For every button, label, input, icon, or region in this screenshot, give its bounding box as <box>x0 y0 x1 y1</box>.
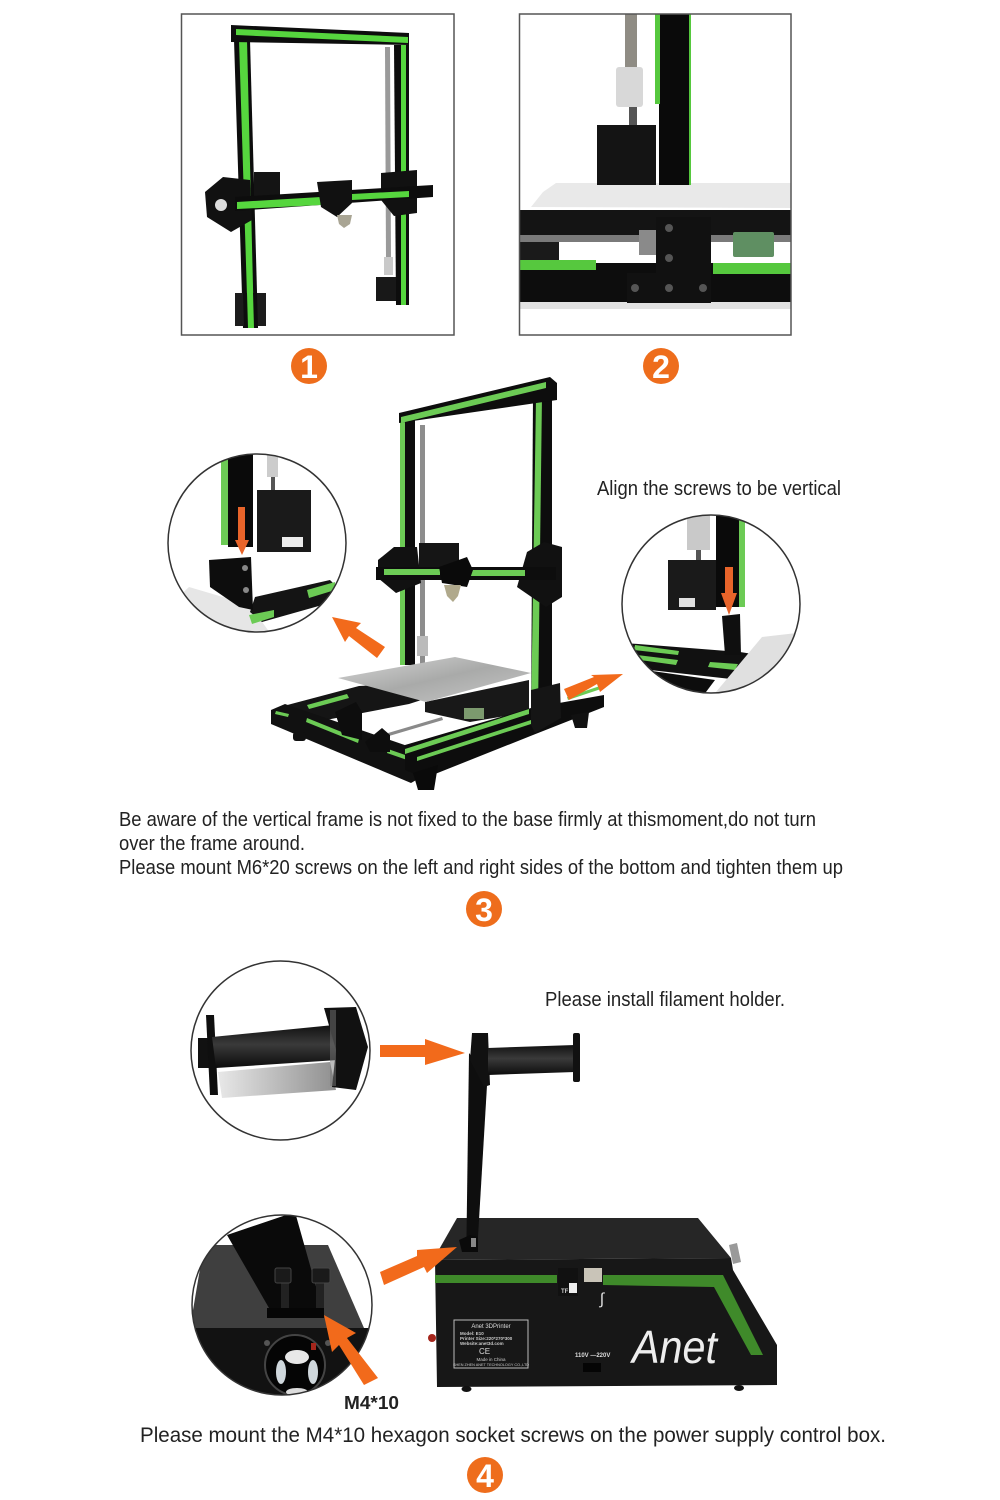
panel: photo 2, motor close-up <box>519 14 791 335</box>
front face <box>435 1258 777 1387</box>
screw 2 shank <box>316 1283 324 1308</box>
top bar green strip <box>236 29 408 43</box>
label marks: CE <box>479 1347 490 1356</box>
left upright green strip <box>239 42 254 293</box>
arrow: to right detail <box>564 674 623 700</box>
lower strip over motor <box>247 293 254 328</box>
bed <box>531 183 791 208</box>
screw <box>625 14 637 68</box>
right upright green <box>531 395 542 717</box>
x arm green right <box>469 570 525 576</box>
green right <box>713 263 791 274</box>
front green 2 <box>417 720 531 761</box>
knob <box>729 1243 741 1264</box>
line 2: over the frame around. <box>119 833 305 855</box>
port panel <box>558 1268 578 1296</box>
extruder motor <box>419 543 459 567</box>
badge 2: 2 <box>652 349 670 385</box>
x arm green right <box>352 191 409 200</box>
label: M4*10: M4*10 <box>344 1393 399 1413</box>
upright <box>716 512 739 607</box>
arrow: to holder <box>380 1039 465 1065</box>
panel 2 border <box>520 14 791 335</box>
detail circle: screws <box>190 1212 375 1398</box>
bracket <box>722 614 741 655</box>
rail <box>250 580 340 622</box>
extruder motor <box>254 172 280 196</box>
grey block <box>639 230 656 255</box>
foot right <box>571 712 589 728</box>
right flange <box>324 1007 368 1090</box>
underside of bed <box>425 680 529 722</box>
mid rail <box>520 242 559 260</box>
coupler <box>616 67 643 107</box>
back rail green <box>307 694 349 709</box>
paragraph: step 3 notes <box>119 809 843 879</box>
arrow: to M4 screw <box>324 1315 378 1385</box>
logo: Anet <box>629 1321 719 1373</box>
slider block 2 <box>365 728 390 752</box>
orange arrow <box>235 507 249 555</box>
label: filament holder: Please install filament holder. <box>545 989 785 1011</box>
usb port <box>584 1268 602 1282</box>
x arm green left <box>384 569 440 575</box>
x arm green left <box>237 197 321 209</box>
mounting holes <box>264 1340 331 1346</box>
base front rail <box>405 695 604 778</box>
right plate <box>517 542 562 607</box>
lower upright over motor <box>243 293 258 328</box>
voltage switch <box>583 1363 601 1372</box>
motor <box>668 560 716 610</box>
badge 1 <box>291 348 327 385</box>
right green <box>567 686 601 700</box>
usb symbol: ∫ <box>599 1291 606 1308</box>
x arm <box>250 185 433 210</box>
top bar <box>231 25 409 45</box>
pole bracket <box>459 1235 478 1252</box>
upright green <box>739 512 745 607</box>
holder end flange <box>573 1033 580 1082</box>
feet <box>462 1385 744 1392</box>
circle outline <box>168 454 346 632</box>
cylinder <box>212 1025 338 1068</box>
detail circle: spool <box>191 961 370 1140</box>
shaft <box>696 550 701 562</box>
voltage label: 110V —220V <box>575 1353 610 1359</box>
base left rail green c <box>387 749 411 761</box>
bracket <box>209 557 253 610</box>
arrow: to left detail <box>332 617 385 658</box>
back rails of base <box>276 682 440 724</box>
circle outline <box>191 961 370 1140</box>
control box with filament holder <box>428 1033 777 1392</box>
motor <box>257 490 311 552</box>
carriage <box>439 557 473 587</box>
motor shaft <box>629 107 637 125</box>
pole <box>227 1212 322 1308</box>
panel: photo 1, vertical frame <box>205 25 433 328</box>
motor <box>597 125 656 185</box>
top bar green <box>401 382 546 423</box>
holder roller <box>488 1045 575 1075</box>
badge 4 <box>467 1457 503 1494</box>
coupler <box>687 515 710 550</box>
rail green top <box>634 645 679 655</box>
right upright <box>531 385 552 725</box>
rail band <box>625 643 790 680</box>
bed plate <box>338 657 531 702</box>
rod <box>519 235 791 242</box>
flange highlight <box>330 1010 336 1086</box>
left plate <box>378 547 421 593</box>
circle outline <box>192 1215 372 1395</box>
bottom corner bracket <box>531 683 561 733</box>
arrow: to bracket <box>380 1247 457 1285</box>
badge 4: 4 <box>476 1458 494 1494</box>
line 1: Be aware of the vertical frame is not fixed to the base firmly at thismoment,do not turn <box>119 809 816 831</box>
panel 1 border <box>182 14 454 335</box>
right plate <box>381 170 417 216</box>
base left rail <box>271 704 425 783</box>
z rod <box>420 425 425 665</box>
detail circle right <box>622 512 805 700</box>
left plate <box>205 177 252 232</box>
printer: assembled frame on base <box>271 377 604 790</box>
coupler <box>267 455 278 477</box>
label border <box>454 1320 528 1368</box>
green rail lower <box>249 610 274 624</box>
opening <box>645 670 715 700</box>
slider block <box>335 702 362 740</box>
badge 2 <box>643 348 679 385</box>
top bar <box>399 377 557 423</box>
right upright <box>394 45 409 305</box>
left upright <box>234 40 258 328</box>
label title: Anet 3DPrinter <box>471 1324 511 1330</box>
badge 3: 3 <box>475 892 493 928</box>
z coupler <box>417 636 428 656</box>
base left rail green a <box>275 711 289 717</box>
label website: Website:anet3d.com <box>460 1341 504 1346</box>
green stripe right <box>603 1275 763 1355</box>
spool content <box>198 1007 368 1098</box>
green stripe left <box>435 1275 557 1283</box>
left upright green <box>400 420 405 665</box>
circle content <box>175 452 340 640</box>
power button <box>428 1334 436 1342</box>
upright green right <box>689 14 691 185</box>
left nut <box>198 1038 216 1068</box>
hotend <box>444 585 461 602</box>
label maker: SHEN ZHEN ANET TECHNOLOGY CO.,LTD <box>453 1363 529 1367</box>
upright green <box>221 452 228 545</box>
bracket holes <box>631 224 707 292</box>
bracket highlight <box>471 1238 476 1247</box>
circle outline <box>622 515 800 693</box>
plate <box>716 632 805 700</box>
connector <box>282 537 303 547</box>
red switch <box>311 1343 316 1350</box>
box top <box>190 1245 364 1328</box>
fan hub <box>285 1350 309 1364</box>
green rail upper <box>307 582 335 598</box>
tf slot <box>569 1283 577 1293</box>
holder flange <box>470 1033 490 1087</box>
badge 1: 1 <box>300 349 318 385</box>
lower rail <box>519 263 791 302</box>
rating label <box>453 1320 529 1368</box>
circle content <box>625 512 805 700</box>
screw 1 head <box>275 1268 291 1283</box>
upright <box>659 14 690 185</box>
top face <box>433 1218 731 1260</box>
green block <box>733 232 774 257</box>
label model: Model: E10 <box>460 1331 484 1336</box>
detail circle left <box>168 452 346 640</box>
label origin: Made in China <box>476 1357 506 1362</box>
white plate <box>175 587 275 640</box>
x arm <box>376 567 556 580</box>
green left <box>519 260 596 270</box>
foot plate <box>267 1308 324 1318</box>
coupler <box>384 257 393 275</box>
pulley <box>215 199 227 211</box>
left upright <box>400 420 415 665</box>
line 3: Please mount M6*20 screws on the left and right sides of the bottom and tighten them up <box>119 857 843 879</box>
foot left <box>293 732 306 741</box>
label size: Printer Size:220*270*300 <box>460 1336 513 1341</box>
badge 3 <box>466 891 502 928</box>
rail green right <box>708 662 738 670</box>
carriage green block <box>464 708 484 719</box>
upright <box>228 452 253 547</box>
carriage <box>317 180 352 217</box>
front green 1 <box>405 709 529 754</box>
label: align screws: Align the screws to be vertical <box>597 478 841 500</box>
box front <box>190 1328 375 1398</box>
bottom left motor <box>235 293 266 326</box>
bracket screws <box>242 565 249 593</box>
reflection <box>218 1062 336 1098</box>
holder pole <box>466 1053 488 1237</box>
left flange <box>206 1015 218 1095</box>
fan blade right <box>308 1360 318 1384</box>
screw 2 head <box>312 1268 330 1283</box>
connector <box>679 598 695 607</box>
hotend <box>337 215 352 228</box>
rod to front <box>388 717 443 736</box>
tf label: TF <box>561 1289 569 1295</box>
rail shadow <box>519 302 791 309</box>
caption: step 4: Please mount the M4*10 hexagon socket screws on the power supply control box. <box>140 1424 886 1447</box>
right upright green strip <box>401 45 406 305</box>
screws content <box>190 1212 375 1398</box>
z rod <box>385 47 391 260</box>
upright green left <box>655 14 660 104</box>
bracket plate <box>627 217 711 303</box>
base left rail green b <box>306 718 359 743</box>
screw 1 shank <box>281 1283 289 1308</box>
upper rail <box>519 210 791 237</box>
foot front <box>413 765 438 790</box>
bottom right motor <box>376 277 396 301</box>
fan blade left <box>276 1360 286 1384</box>
rail green low <box>637 655 678 665</box>
fan <box>265 1335 325 1395</box>
orange arrow <box>721 567 737 615</box>
fan blade bottom <box>286 1388 308 1396</box>
shaft <box>271 477 275 493</box>
